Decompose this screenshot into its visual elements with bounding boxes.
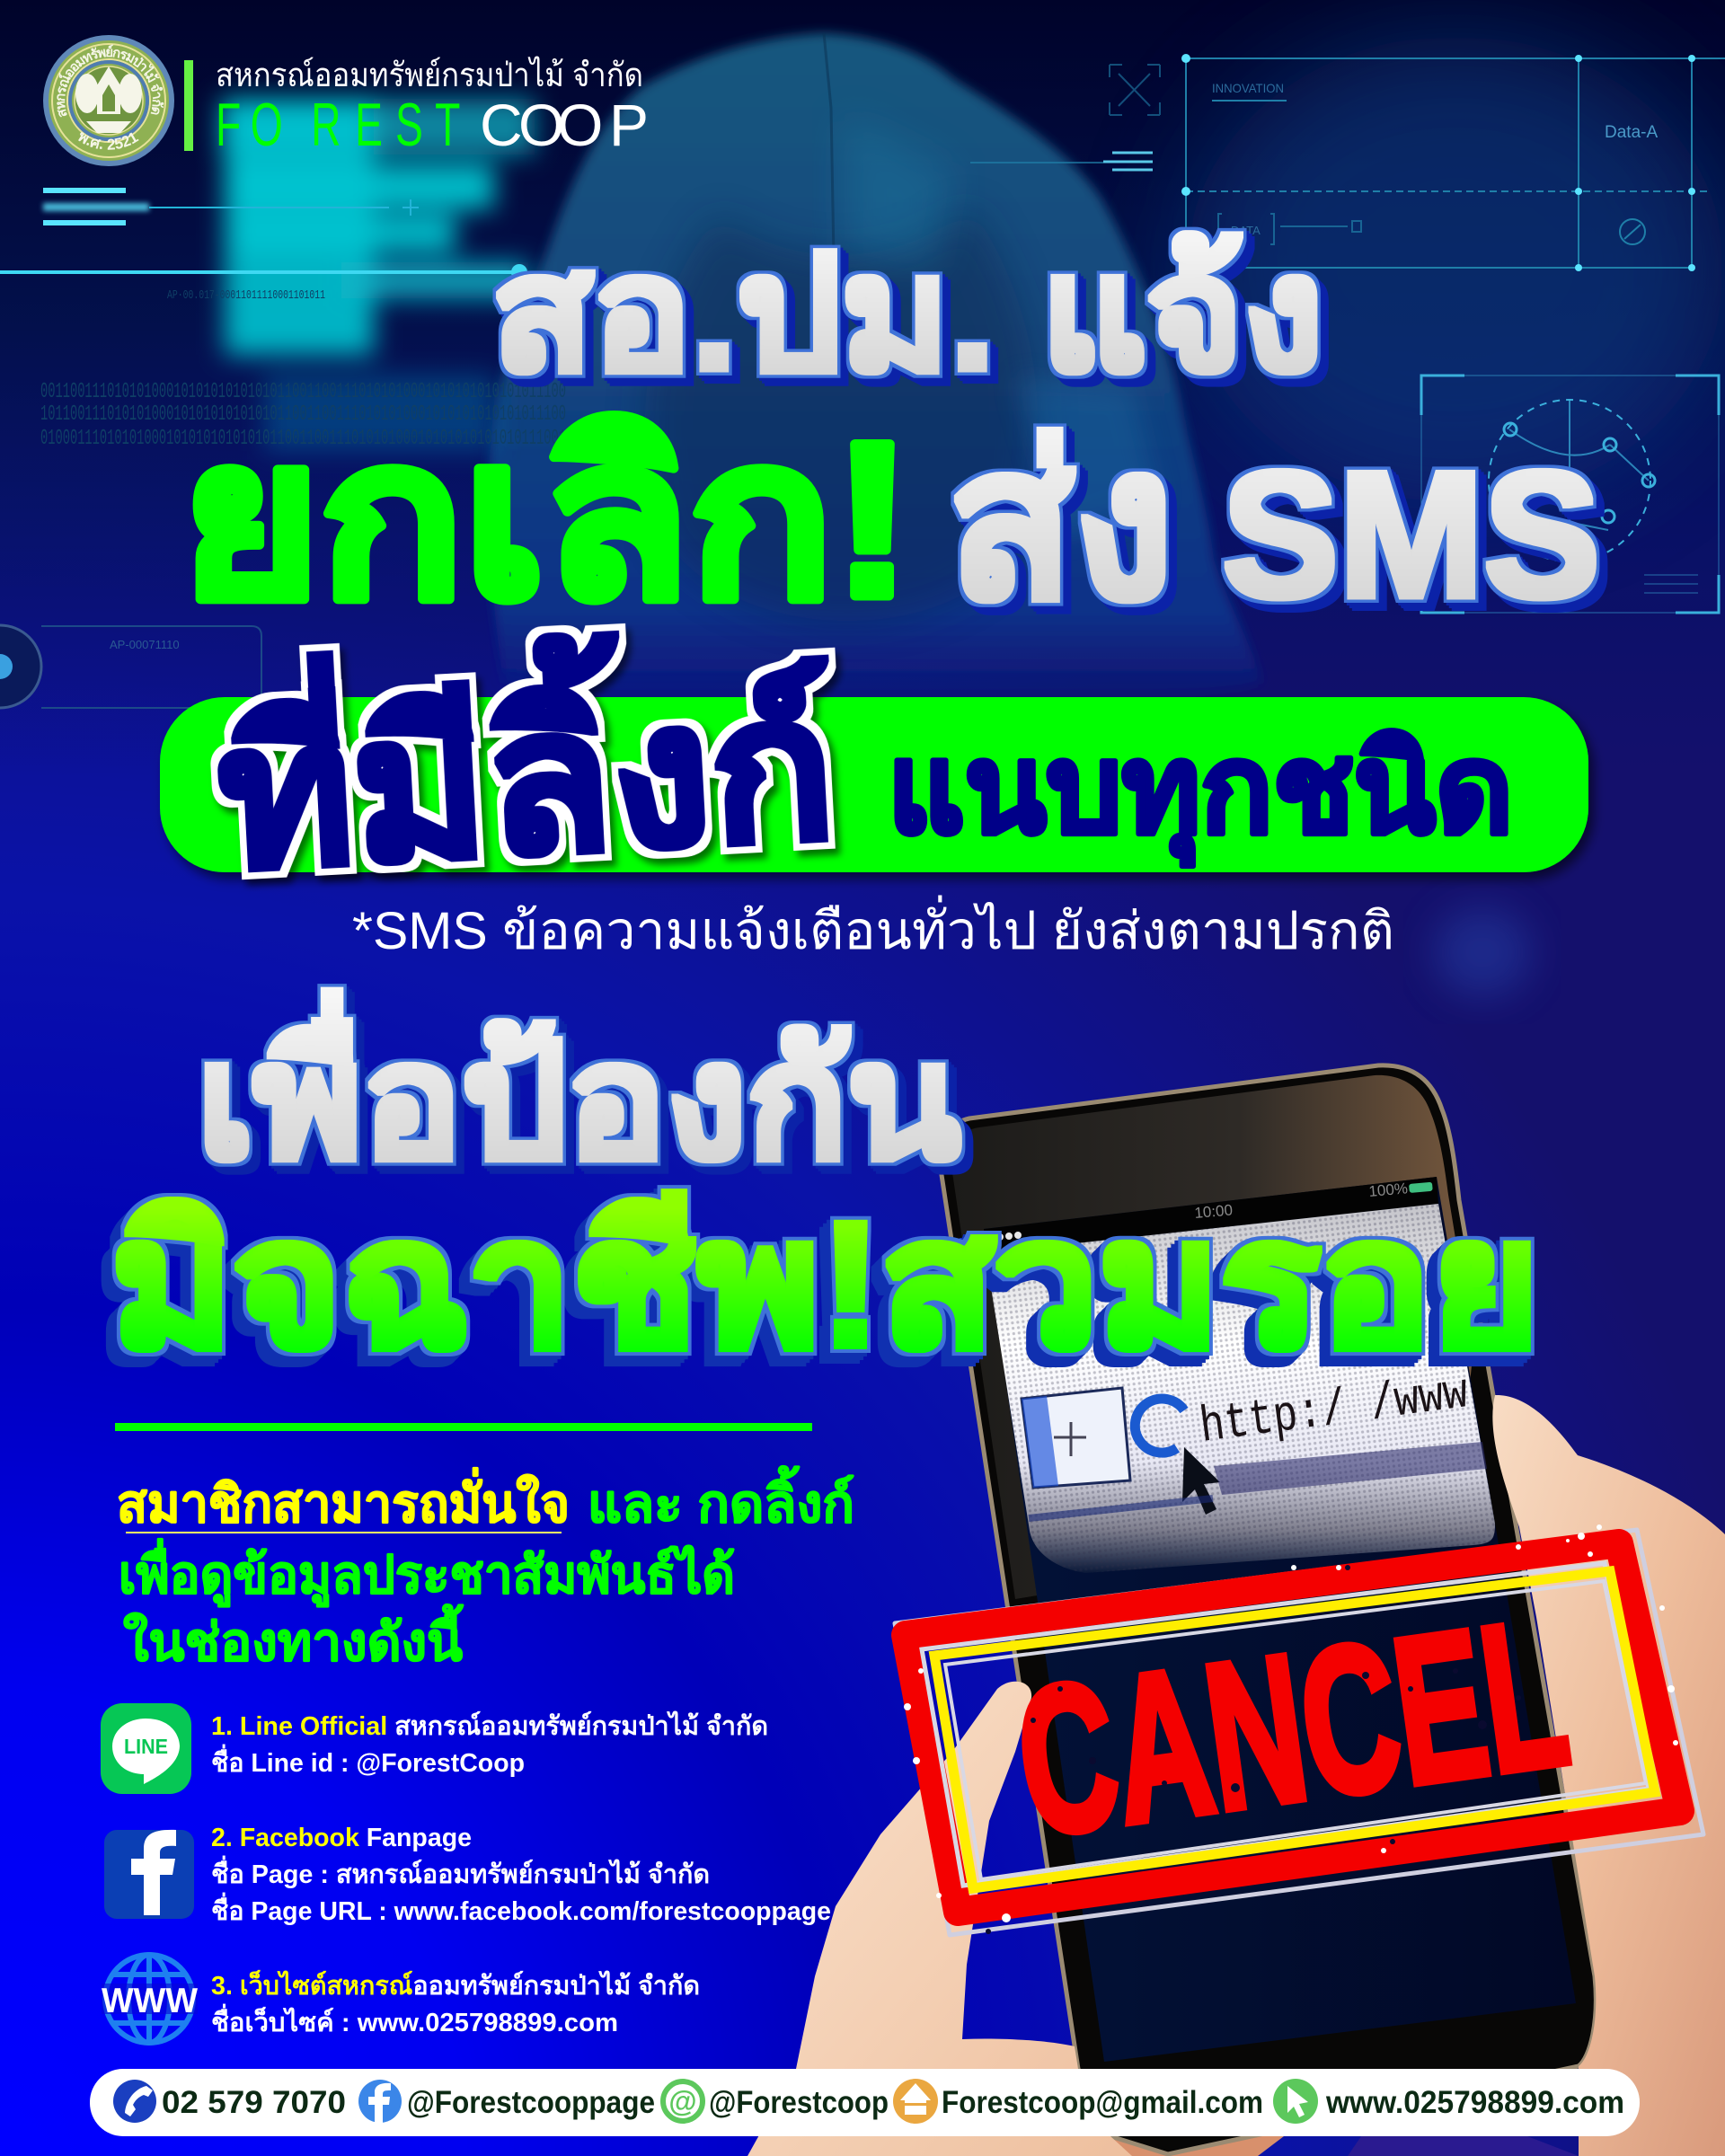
tech decorations: AP·00.017-00011011110001101011	[167, 288, 325, 303]
attachment text: แนบทุกชนิด	[888, 720, 1513, 867]
logo emblem: พ.ศ. 2521	[78, 132, 139, 150]
line official text: ชื่อ Line id : @ForestCoop	[211, 1744, 525, 1778]
facebook text: ชื่อ Page : สหกรณ์ออมทรัพย์กรมป่าไม้ จำกัด	[211, 1855, 710, 1889]
headline: to prevent: เพื่อป้องกัน	[197, 990, 960, 1191]
phone	[941, 1065, 1596, 2154]
icon: at sign	[663, 2081, 703, 2121]
tech decorations: AP-00071110	[110, 638, 180, 651]
facebook text	[211, 1824, 831, 1926]
tech decorations: Data-A	[1605, 123, 1658, 142]
icon: cursor	[1273, 2079, 1318, 2124]
website: www.025798899.com	[1325, 2085, 1624, 2120]
icon: at sign: @	[668, 2085, 697, 2117]
icon: WWW globe	[102, 1955, 198, 2043]
headline: send SMS: ส่ง SMS	[949, 405, 1600, 641]
icon: WWW globe: WWW	[102, 1982, 198, 2020]
phone screen	[984, 1177, 1576, 2062]
forest coop wordmark: COOP	[480, 92, 649, 158]
phone screen: 100%	[1368, 1180, 1409, 1200]
assurance text: เพื่อดูข้อมูลประชาสัมพันธ์ได้	[119, 1538, 735, 1607]
website text	[211, 1969, 700, 2037]
shaded palm below phone	[1348, 2136, 1579, 2156]
icon: LINE	[101, 1703, 191, 1794]
green pill banner	[160, 621, 1588, 911]
tech decorations: 10110011101010100010101010101010110011001110101010001010101010101011100	[40, 402, 566, 427]
facebook handle: @Forestcooppage	[407, 2085, 655, 2120]
tech decorations	[0, 54, 1725, 708]
tech decorations: 01000111010101000101010101010101100110011101010100010101010101010111001	[40, 427, 566, 451]
phone screen: 10:00	[1194, 1201, 1234, 1222]
forest coop wordmark	[216, 91, 649, 159]
website text: 3. เว็บไซต์สหกรณ์ออมทรัพย์กรมป่าไม้ จำกัด	[211, 1969, 700, 2001]
tech decorations: INNOVATION	[1212, 81, 1284, 95]
logo divider	[184, 60, 193, 151]
right hand	[1492, 1395, 1725, 2156]
hand behind phone	[1110, 2136, 1284, 2156]
assurance text: ในช่องทางดังนี้	[123, 1604, 464, 1672]
browser screen image	[986, 1204, 1495, 1573]
icon: home mail	[893, 2079, 938, 2124]
email: Forestcoop@gmail.com	[942, 2085, 1263, 2120]
linked text: ที่มีลิ้งก์	[211, 621, 840, 911]
icon: LINE: LINE	[124, 1735, 168, 1758]
assurance text	[117, 1466, 854, 1672]
headline: scammers: มิจฉาชีพ!สวมรอย	[111, 1185, 1540, 1383]
icon: facebook circle	[358, 2080, 402, 2123]
phone number: 02 579 7070	[162, 2085, 346, 2120]
cancel stamp	[895, 1524, 1703, 1935]
icon: Facebook	[104, 1830, 194, 1919]
assurance text: สมาชิกสามารถมั่นใจ	[117, 1467, 570, 1533]
contact bar	[90, 2069, 1640, 2136]
tech decorations: 00110011101010100010101010101010110011001110101010001010101010101011100	[40, 380, 566, 404]
line handle: @Forestcoop	[709, 2085, 889, 2120]
headline: cancel: ยกเลิก!	[181, 396, 912, 642]
browser screen image: http:/ /www	[1197, 1364, 1472, 1456]
organisation name: สหกรณ์ออมทรัพย์กรมป่าไม้ จำกัด	[216, 56, 643, 93]
green divider	[115, 1423, 812, 1431]
facebook text: ชื่อ Page URL : www.facebook.com/forestcooppage	[211, 1892, 831, 1926]
left hand	[748, 1682, 1132, 2156]
website text: ชื่อเว็บไซค์ : www.025798899.com	[211, 2003, 618, 2037]
forest coop wordmark: FOREST	[216, 91, 460, 159]
hooded figure	[489, 33, 1262, 713]
assurance text: และ กดลิ้งก์	[588, 1466, 854, 1533]
headline line 1: สอ.ปม. แจ้ง	[492, 225, 1323, 403]
line official text	[211, 1710, 768, 1778]
note: *SMS ข้อความแจ้งเตือนทั่วไป ยังส่งตามปรกติ	[352, 895, 1394, 960]
logo emblem	[43, 35, 174, 166]
logo emblem: สหกรณ์ออมทรัพย์กรมป่าไม้ จำกัด	[57, 45, 164, 117]
tech decorations: DATA	[1231, 224, 1261, 237]
facebook text: 2. Facebook Fanpage	[211, 1824, 472, 1852]
line official text: 1. Line Official สหกรณ์ออมทรัพย์กรมป่าไม้ จำกัด	[211, 1710, 768, 1741]
icon: phone	[113, 2080, 156, 2123]
blurred cyan letter F	[220, 99, 535, 451]
